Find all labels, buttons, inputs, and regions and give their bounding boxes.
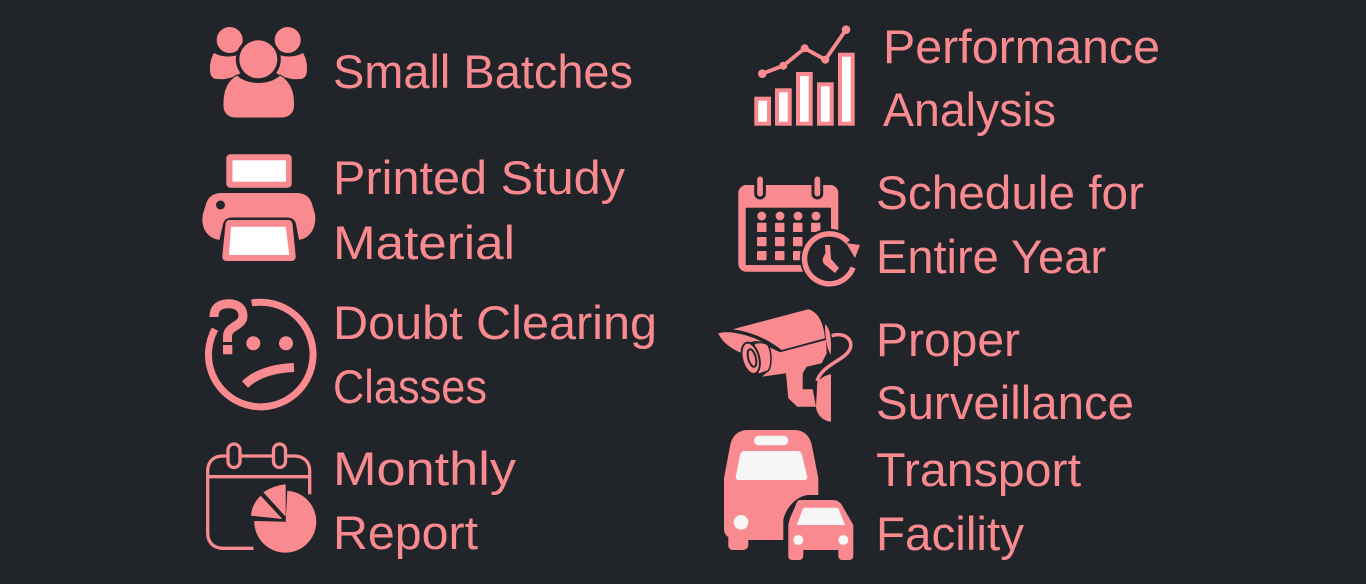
label: Transport Facility: Facility xyxy=(876,507,1025,560)
label: Schedule for Entire Year: Entire Year xyxy=(876,230,1106,283)
icon: printer xyxy=(202,154,315,261)
label: Monthly Report xyxy=(333,442,517,559)
label: Monthly Report: Report xyxy=(333,506,478,559)
icon: calendar with pie chart xyxy=(208,444,316,553)
label: Schedule for Entire Year xyxy=(876,166,1144,283)
label: Small Batches: Small Batches xyxy=(333,45,633,98)
label: Schedule for Entire Year: Schedule for xyxy=(876,166,1144,219)
icon: surveillance camera xyxy=(718,309,851,422)
label: Proper Surveillance xyxy=(876,313,1134,429)
label: Performance Analysis: Performance xyxy=(883,20,1160,73)
label: Doubt Clearing Classes: Classes xyxy=(333,360,487,413)
label: Printed Study Material: Material xyxy=(333,216,515,269)
label: Doubt Clearing Classes: Doubt Clearing xyxy=(333,296,657,349)
label: Printed Study Material xyxy=(333,151,626,269)
label: Monthly Report: Monthly xyxy=(333,442,517,495)
icon: bar chart with trend line xyxy=(756,25,853,124)
icon: calendar with clock xyxy=(738,175,860,288)
icon: group of people xyxy=(210,27,307,118)
label: Proper Surveillance: Surveillance xyxy=(876,376,1134,429)
label: Performance Analysis: Analysis xyxy=(883,83,1056,136)
label: Proper Surveillance: Proper xyxy=(876,313,1020,366)
label: Transport Facility: Transport xyxy=(876,443,1081,496)
label: Printed Study Material: Printed Study xyxy=(333,151,626,204)
icon: bus and car xyxy=(724,430,853,560)
label: Doubt Clearing Classes xyxy=(333,296,657,413)
label: Transport Facility xyxy=(876,443,1081,560)
label: Performance Analysis xyxy=(883,20,1160,136)
icon: confused face with question mark xyxy=(208,302,313,407)
